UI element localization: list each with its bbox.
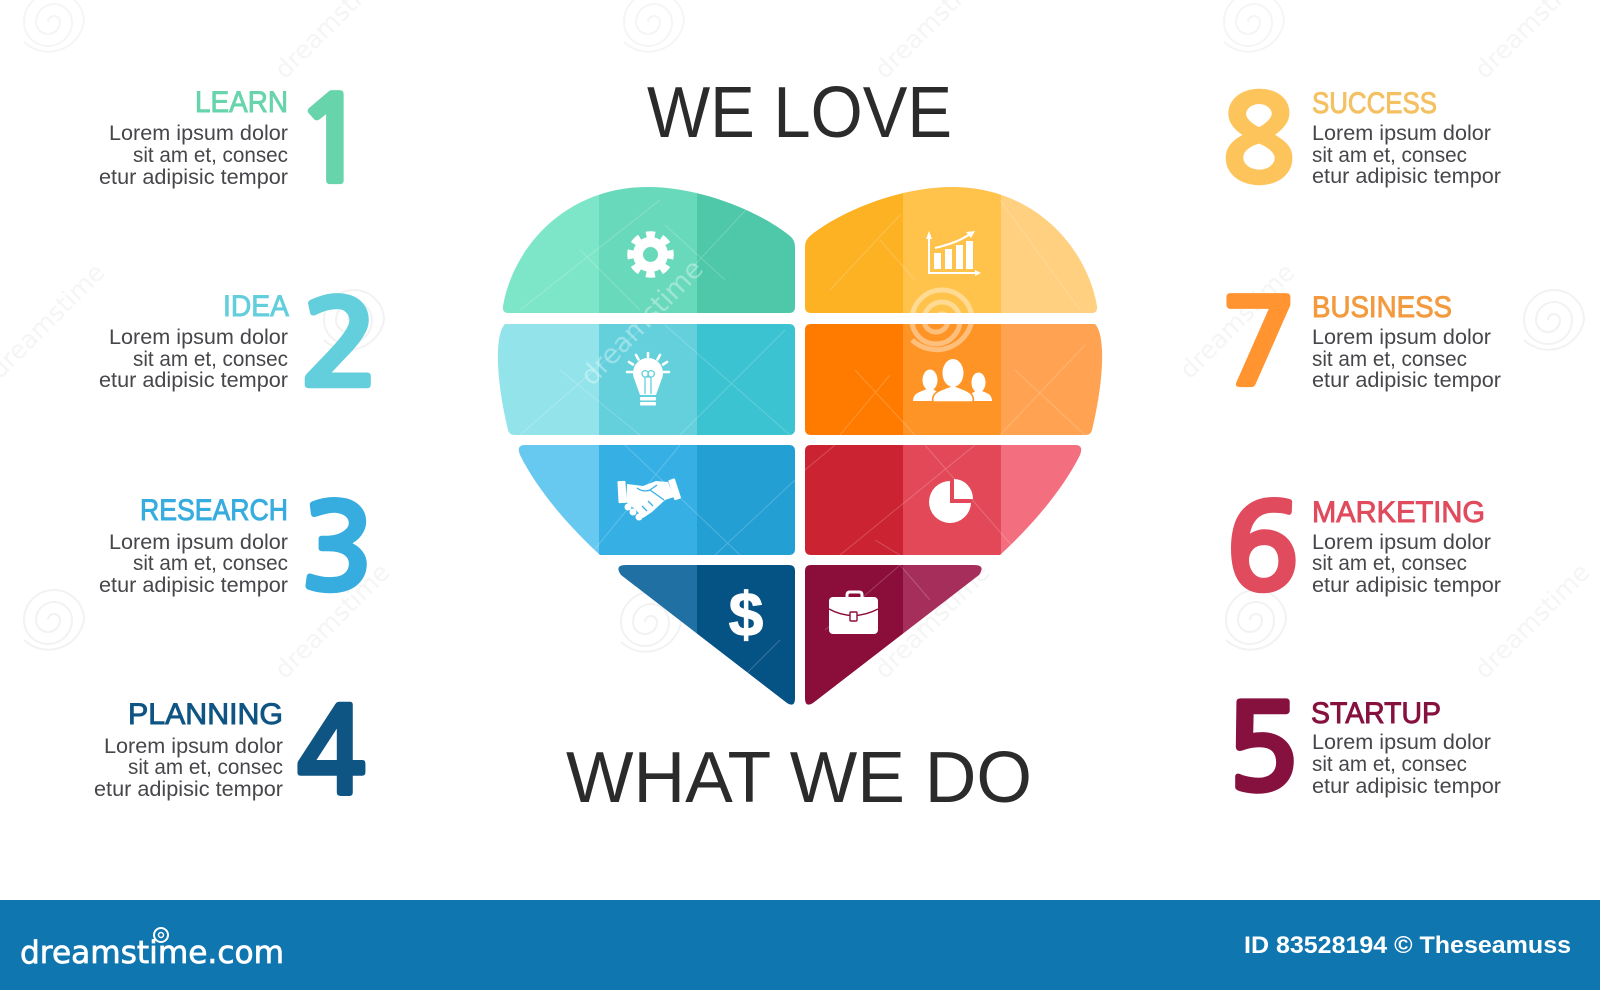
heart segment 8: success (805, 187, 1098, 313)
heart segment 5: startup (805, 565, 982, 705)
heart segment 3: research (518, 445, 795, 555)
item 3: research (99, 490, 375, 608)
number 6: 6 (1225, 490, 1300, 608)
faint background watermarks: dreamstime (269, 558, 395, 684)
description planning: etur adipisic tempor (94, 778, 283, 801)
number 8: 8 (1221, 82, 1296, 200)
footer logo: dreamstime.com (20, 935, 284, 971)
description startup: sit am et, consec (1312, 753, 1467, 776)
number 4: 4 (296, 694, 367, 812)
description idea (99, 326, 288, 392)
item 1: learn (99, 82, 371, 200)
heart segment 6: marketing (805, 445, 1082, 555)
icon: growth chart (926, 231, 981, 276)
description research: Lorem ipsum dolor (109, 531, 288, 554)
item 4: planning (94, 694, 367, 812)
heading idea: IDEA (223, 290, 289, 323)
icon: gear (630, 234, 670, 274)
description marketing: Lorem ipsum dolor (1312, 531, 1491, 554)
faint background watermarks (0, 0, 1595, 684)
heart segment 7: business (805, 324, 1102, 435)
description success: sit am et, consec (1312, 144, 1467, 167)
footer credit: ID 83528194 © Theseamuss (1244, 932, 1571, 959)
item 5: startup (1225, 691, 1501, 809)
description marketing: etur adipisic tempor (1312, 574, 1501, 597)
description success: etur adipisic tempor (1312, 165, 1501, 188)
spiral watermark on heart (912, 290, 972, 350)
heart segment 2: idea (498, 324, 795, 435)
description learn: sit am et, consec (133, 144, 288, 167)
heart segment 1: learn (502, 187, 795, 313)
heading marketing: MARKETING (1312, 496, 1485, 529)
icon: dollar sign: $ (729, 581, 763, 650)
item 2: idea (99, 286, 381, 404)
description research (99, 531, 288, 597)
faint background watermarks: dreamstime (1174, 258, 1300, 384)
heading planning: PLANNING (128, 698, 283, 731)
icon: team of people (913, 359, 992, 402)
heading research: RESEARCH (140, 494, 288, 527)
icon: pie chart (929, 479, 973, 523)
item 8: success (1221, 82, 1501, 200)
heart chart (490, 180, 1111, 710)
description learn: Lorem ipsum dolor (109, 122, 288, 145)
description business: etur adipisic tempor (1312, 369, 1501, 392)
description planning: Lorem ipsum dolor (104, 735, 283, 758)
description planning (94, 735, 283, 801)
description business (1312, 326, 1501, 392)
faint background watermarks: dreamstime (869, 558, 995, 684)
description research: etur adipisic tempor (99, 574, 288, 597)
spiral watermark on dollar segment (621, 592, 681, 652)
description startup: Lorem ipsum dolor (1312, 731, 1491, 754)
number 5: 5 (1225, 691, 1300, 809)
description business: sit am et, consec (1312, 348, 1467, 371)
description learn (99, 122, 288, 189)
number 3: 3 (300, 490, 375, 608)
diagonal watermark on heart: dreamstime (575, 254, 710, 392)
description startup: etur adipisic tempor (1312, 775, 1501, 798)
number 1: 1 (293, 82, 371, 200)
number 7: 7 (1220, 285, 1298, 403)
number 2: 2 (299, 286, 381, 404)
description idea: etur adipisic tempor (99, 369, 288, 392)
icon: briefcase (829, 592, 878, 634)
description marketing: sit am et, consec (1312, 552, 1467, 575)
item 6: marketing (1225, 490, 1501, 608)
heading startup: STARTUP (1311, 697, 1441, 730)
description idea: Lorem ipsum dolor (109, 326, 288, 349)
heart segment 4: planning (618, 565, 795, 705)
description planning: sit am et, consec (128, 756, 283, 779)
heart watermark lines (520, 200, 1085, 685)
description success: Lorem ipsum dolor (1312, 122, 1491, 145)
description marketing (1312, 531, 1501, 597)
faint background watermarks: dreamstime (1469, 558, 1595, 684)
icon: light bulb (627, 353, 669, 406)
footer bar (0, 900, 1600, 990)
description learn: etur adipisic tempor (99, 166, 288, 189)
heading learn: LEARN (195, 86, 288, 119)
description idea: sit am et, consec (133, 348, 288, 371)
heading business: BUSINESS (1312, 291, 1452, 324)
icon: handshake (617, 478, 681, 520)
heading success: SUCCESS (1312, 87, 1437, 120)
description business: Lorem ipsum dolor (1312, 326, 1491, 349)
title: what we do: WHAT WE DO (566, 738, 1032, 818)
description research: sit am et, consec (133, 552, 288, 575)
description startup (1312, 731, 1501, 798)
description success (1312, 122, 1501, 188)
title: we love: WE LOVE (647, 73, 952, 153)
item 7: business (1220, 285, 1501, 403)
